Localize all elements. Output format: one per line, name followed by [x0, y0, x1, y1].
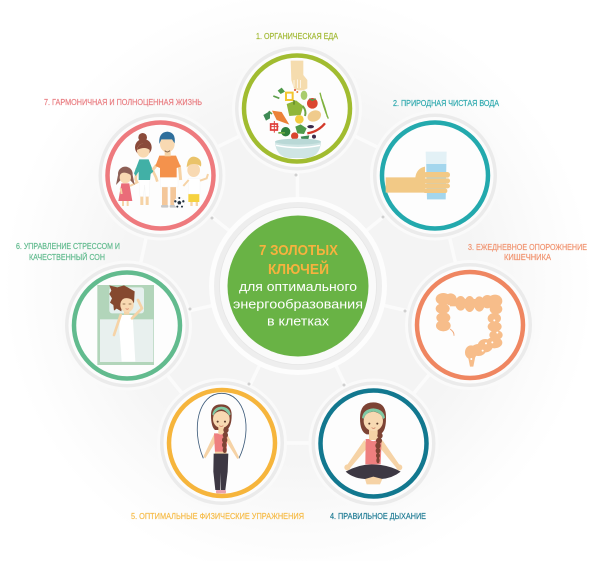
icon: sleeping woman — [97, 285, 154, 365]
icon: salad bowl — [263, 61, 328, 158]
panel: 5 exercise — [157, 378, 287, 508]
center title: энергообразования — [233, 296, 363, 312]
icon: family — [116, 132, 208, 208]
panel: 1 organic food — [232, 44, 362, 174]
label: 6 stress and sleep: КАЧЕСТВЕННЫЙ СОН — [29, 253, 105, 262]
label: 1 organic food: 1. ОРГАНИЧЕСКАЯ ЕДА — [256, 32, 339, 41]
icon: woman with skipping rope — [197, 393, 246, 493]
panel: 2 clean water — [370, 110, 500, 240]
label: 7 harmonious life: 7. ГАРМОНИЧНАЯ И ПОЛНОЦЕННАЯ ЖИЗНЬ — [44, 98, 202, 107]
label: 6 stress and sleep — [16, 242, 120, 262]
label: 4 breathing: 4. ПРАВИЛЬНОЕ ДЫХАНИЕ — [330, 512, 426, 521]
center hub — [209, 197, 387, 375]
center title: 7 ЗОЛОТЫХ — [259, 242, 338, 259]
label: 6 stress and sleep: 6. УПРАВЛЕНИЕ СТРЕССОМ И — [16, 242, 120, 251]
panel: 4 breathing — [308, 378, 438, 508]
center title: в клетках — [267, 314, 330, 328]
center title — [233, 242, 363, 328]
label: 5 exercise: 5. ОПТИМАЛЬНЫЕ ФИЗИЧЕСКИЕ УПРАЖНЕНИЯ — [131, 512, 304, 521]
girl — [116, 167, 137, 206]
boy — [183, 157, 208, 206]
icon: meditating woman — [344, 402, 402, 484]
panel: 7 harmonious life — [96, 110, 226, 240]
father — [153, 132, 181, 208]
label: 3 bowel movement: 3. ЕЖЕДНЕВНОЕ ОПОРОЖНЕНИЕ — [468, 243, 587, 252]
center title: КЛЮЧЕЙ — [268, 260, 329, 278]
icon: hand holding glass — [386, 152, 450, 199]
label: 2 clean water: 2. ПРИРОДНАЯ ЧИСТАЯ ВОДА — [393, 99, 500, 108]
panel: 3 bowel movement — [405, 260, 535, 390]
panel: 6 stress and sleep — [62, 260, 192, 390]
label: 3 bowel movement: КИШЕЧНИКА — [504, 253, 552, 262]
icon: ball — [174, 197, 185, 208]
mother — [134, 133, 157, 205]
center title: для оптимального — [239, 279, 357, 294]
label: 3 bowel movement — [468, 243, 587, 262]
icon: colon — [436, 293, 503, 367]
